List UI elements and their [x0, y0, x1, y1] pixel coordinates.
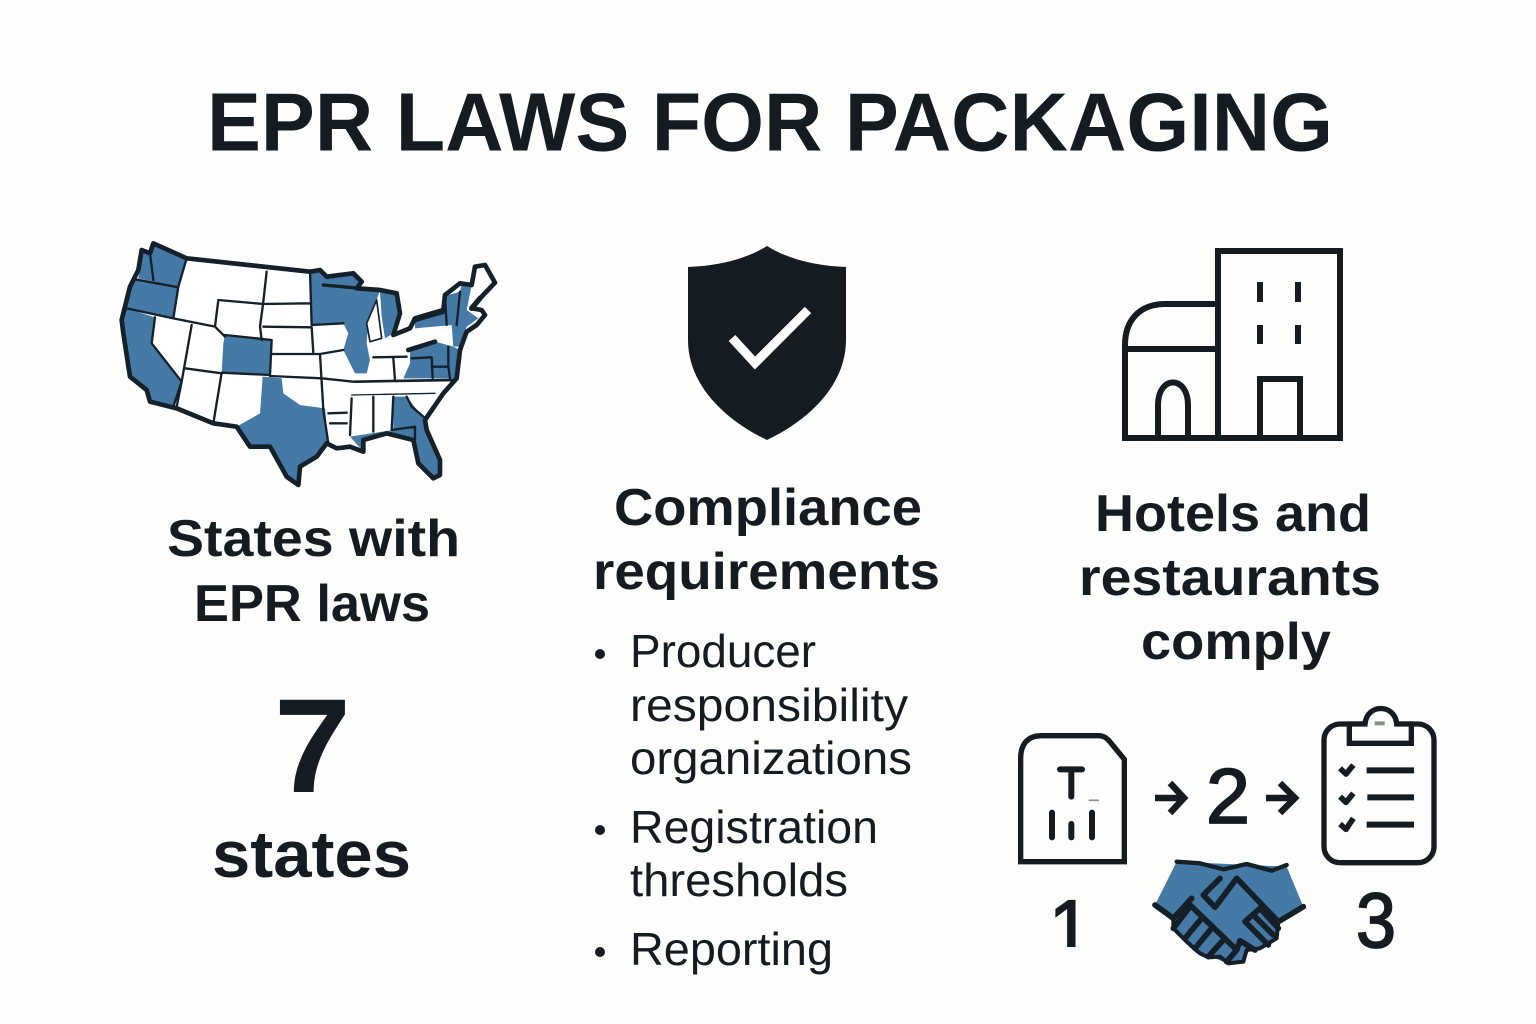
- arrow: step 2 to 3: [1266, 783, 1295, 813]
- icon: shield with check: [688, 246, 846, 440]
- step number 3: 3: [1356, 876, 1396, 964]
- icon: handshake: [1155, 862, 1303, 963]
- icon: document step 1: [1021, 736, 1124, 862]
- icon: US map: [122, 243, 495, 485]
- heading: states with EPR laws: [167, 510, 460, 633]
- bullet list: Reporting: [630, 923, 833, 975]
- step number 1: 1: [1049, 884, 1091, 972]
- icon: clipboard checklist: [1324, 708, 1434, 863]
- panel: states with EPR laws: [122, 243, 495, 891]
- heading: hotels and restaurants comply: comply: [1141, 613, 1331, 671]
- panel: hotels and restaurants comply: [1021, 251, 1434, 972]
- heading: compliance requirements: requirements: [593, 543, 940, 601]
- stat: 7 states: 7: [274, 672, 351, 821]
- bullet list: Producer: [630, 625, 816, 677]
- bullet list: thresholds: [630, 854, 848, 906]
- icon: hotel building: [1125, 251, 1340, 438]
- heading: compliance requirements: Compliance: [614, 479, 922, 537]
- arrow: step 1 to 2: [1155, 783, 1184, 813]
- bullet list: organizations: [630, 732, 912, 784]
- title: EPR LAWS FOR PACKAGING: [207, 76, 1333, 168]
- stat: 7 states: states: [212, 817, 411, 891]
- panel: compliance requirements: [593, 246, 940, 975]
- heading: hotels and restaurants comply: Hotels and: [1095, 485, 1371, 543]
- heading: hotels and restaurants comply: [1079, 485, 1381, 671]
- bullet list: responsibility: [630, 679, 908, 731]
- bullet list: Registration: [630, 801, 878, 853]
- stat: 7 states: [212, 672, 411, 891]
- heading: states with EPR laws: States with: [167, 510, 460, 568]
- heading: states with EPR laws: EPR laws: [194, 575, 430, 633]
- step number 2: 2: [1206, 752, 1250, 840]
- bullet list: [595, 625, 912, 975]
- heading: compliance requirements: [593, 479, 940, 601]
- heading: hotels and restaurants comply: restaurants: [1079, 549, 1381, 607]
